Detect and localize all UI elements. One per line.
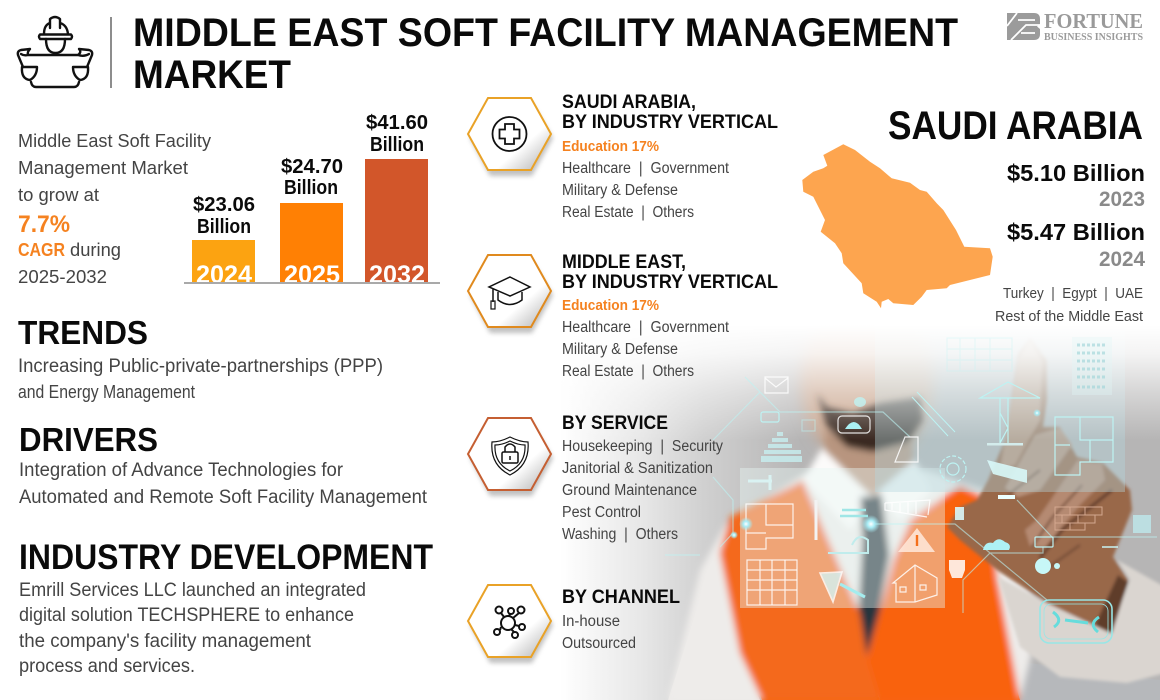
- sleeve: [998, 560, 1160, 683]
- header divider: [110, 17, 112, 88]
- section: by service: Washing | Others: [562, 526, 678, 543]
- bar 2032: Billion: [370, 134, 424, 156]
- title: MIDDLE EAST SOFT FACILITY MANAGEMENT: [133, 11, 958, 55]
- helmet lower: [828, 537, 868, 553]
- section: Saudi Arabia by industry vertical: Military & Defense: [562, 182, 678, 199]
- industry development: process and services.: [19, 656, 195, 677]
- industry development: digital solution TECHSPHERE to enhance: [19, 605, 354, 626]
- title: MARKET: [133, 53, 291, 97]
- market growth text: [18, 130, 212, 287]
- photo: worker touching holographic interface: [560, 285, 1160, 700]
- logo wordmark: FORTUNE: [1044, 9, 1143, 33]
- industry development: INDUSTRY DEVELOPMENT: [19, 538, 433, 577]
- drivers: DRIVERS: [19, 421, 158, 458]
- plug: [998, 495, 1015, 499]
- stacked bars: [761, 432, 802, 462]
- section: by service: Housekeeping | Security: [562, 438, 723, 455]
- section: by service: Janitorial & Sanitization: [562, 460, 713, 477]
- yield triangle: [820, 572, 842, 602]
- market growth text: 2025-2032: [18, 266, 107, 287]
- section: by channel: In-house: [562, 613, 620, 630]
- chair: [895, 437, 918, 462]
- chart axis: [184, 282, 440, 284]
- Saudi Arabia values: $5.10 Billion: [1007, 160, 1145, 186]
- left vest panel: [720, 480, 885, 700]
- holographic icons: [665, 337, 1157, 643]
- trends: TRENDS: [18, 314, 148, 351]
- bar 2025: Billion: [284, 177, 338, 199]
- Saudi Arabia values: $5.47 Billion: [1007, 219, 1145, 245]
- bar 2024: [192, 194, 255, 289]
- right floor plan: [1055, 417, 1113, 475]
- worker base clothing: [668, 600, 1020, 700]
- gears white: [1035, 558, 1060, 574]
- small bars box: [802, 420, 815, 431]
- section: by service: [562, 412, 723, 543]
- bar 2032: $41.60: [366, 112, 428, 134]
- section: Middle East by industry vertical: Healthcare | Government: [562, 319, 730, 336]
- brick wall: [1055, 507, 1102, 530]
- title: [133, 11, 958, 97]
- gear: [940, 456, 966, 482]
- cloud: [983, 539, 1010, 550]
- bar 2025: 2025: [284, 261, 340, 289]
- house: [893, 565, 937, 602]
- wrench: [840, 584, 865, 597]
- middle finger: [1005, 428, 1072, 497]
- crisp base for the bottom edge of the figure: [668, 620, 1160, 700]
- left panel: [740, 468, 945, 608]
- logo: Fortune Business Insights: [1007, 9, 1143, 43]
- warning triangle: [898, 528, 935, 552]
- bar 2032: [365, 112, 428, 289]
- bar 2025: $24.70: [281, 156, 343, 178]
- section: Saudi Arabia by industry vertical: Real Estate | Others: [562, 204, 694, 221]
- tube tool: [917, 392, 955, 432]
- envelope: [765, 377, 788, 393]
- crane: [980, 382, 1040, 444]
- icon: channel network hexagon: [468, 585, 553, 663]
- hands: [22, 67, 88, 80]
- bar 2025: [280, 156, 343, 289]
- collar: [803, 448, 932, 530]
- translucent panels: [740, 325, 1125, 608]
- logo mark: [1007, 13, 1040, 40]
- worker figure: [668, 393, 1040, 700]
- trends: [18, 314, 383, 402]
- CAGR label: CAGR: [18, 240, 65, 260]
- helmet: [39, 17, 72, 39]
- section: by service: BY SERVICE: [562, 412, 668, 434]
- industry development: Emrill Services LLC launched an integrated: [19, 580, 366, 601]
- index finger highlight: [1000, 342, 1042, 470]
- section: by service: Pest Control: [562, 504, 641, 521]
- tie: [858, 494, 890, 660]
- left building grid: [747, 560, 797, 605]
- leaf blob: [854, 397, 866, 407]
- section: Saudi Arabia by industry vertical: [562, 91, 778, 221]
- neck: [825, 430, 915, 495]
- saw: [987, 460, 1027, 483]
- right vest panel: [867, 485, 1020, 700]
- Saudi Arabia values: 2024: [1099, 247, 1145, 271]
- section: Middle East by industry vertical: [562, 251, 778, 380]
- section: Middle East by industry vertical: Military & Defense: [562, 341, 678, 358]
- drivers: Automated and Remote Soft Facility Management: [19, 487, 428, 508]
- section: Saudi Arabia by industry vertical: BY INDUSTRY VERTICAL: [562, 111, 778, 133]
- industry development: [19, 538, 433, 677]
- blueprint: [18, 49, 92, 87]
- trends: Increasing Public-private-partnerships (PPP): [18, 356, 383, 377]
- wrench box: [1040, 600, 1112, 643]
- industry development: the company's facility management: [19, 631, 312, 652]
- ladder: [885, 500, 930, 517]
- post sign: [814, 500, 818, 540]
- head: [801, 295, 933, 465]
- hand and sleeve: [947, 337, 1160, 683]
- section: by channel: [562, 586, 680, 652]
- market growth text: Middle East Soft Facility: [18, 130, 212, 151]
- lock box: [761, 412, 779, 422]
- top fade to white: [560, 285, 1160, 440]
- icon: healthcare hexagon: [468, 98, 553, 176]
- bar 2024: Billion: [197, 216, 251, 238]
- Saudi Arabia values: [1007, 160, 1145, 271]
- photo backdrop: [560, 325, 1160, 700]
- drivers: Integration of Advance Technologies for: [19, 460, 344, 481]
- icon: graduation cap hexagon: [468, 255, 553, 333]
- beard: [817, 393, 923, 452]
- upper right panel: [875, 325, 1125, 492]
- section: Middle East by industry vertical: Real Estate | Others: [562, 363, 694, 380]
- bar chart: [184, 112, 440, 289]
- section: Middle East by industry vertical: BY INDUSTRY VERTICAL: [562, 271, 778, 293]
- icon: security shield hexagon: [468, 418, 553, 496]
- top grid building: [947, 338, 1012, 371]
- section: by channel: BY CHANNEL: [562, 586, 680, 608]
- section: by channel: Outsourced: [562, 635, 636, 652]
- trends: and Energy Management: [18, 381, 195, 402]
- market growth text: during: [70, 239, 121, 260]
- service bell: [838, 416, 870, 433]
- section: by service: Ground Maintenance: [562, 482, 697, 499]
- face: [46, 39, 65, 53]
- bar 2024: $23.06: [193, 194, 255, 216]
- ring finger: [1025, 460, 1105, 547]
- hand: [947, 337, 1132, 633]
- logo tagline: BUSINESS INSIGHTS: [1044, 32, 1143, 43]
- hammer: [748, 475, 772, 490]
- bar 2032: 2032: [369, 261, 425, 289]
- small square: [1133, 515, 1151, 533]
- CAGR value: 7.7%: [18, 211, 70, 238]
- drivers: [19, 421, 428, 508]
- section: Saudi Arabia by industry vertical: SAUDI ARABIA,: [562, 91, 696, 113]
- section: Middle East by industry vertical: Education 17%: [562, 297, 659, 314]
- key: [1102, 546, 1118, 548]
- other regions: Turkey | Egypt | UAE: [1003, 285, 1143, 302]
- market growth text: to grow at: [18, 184, 99, 205]
- other regions: Rest of the Middle East: [995, 308, 1144, 325]
- glow dots: [730, 409, 1041, 539]
- people: [949, 560, 965, 578]
- header icon: engineer with blueprint: [18, 17, 92, 87]
- other regions: [995, 285, 1144, 325]
- tall building: [1072, 337, 1112, 395]
- little finger shadow: [1040, 490, 1112, 558]
- bar 2024: 2024: [196, 261, 252, 289]
- helmet: [840, 510, 868, 516]
- left floor plan: [746, 504, 793, 549]
- Saudi Arabia values: 2023: [1099, 187, 1145, 211]
- circuit lines: [665, 377, 1157, 613]
- section: Saudi Arabia by industry vertical: Healthcare | Government: [562, 160, 730, 177]
- small plug box: [1035, 537, 1053, 547]
- map: Saudi Arabia: [802, 144, 993, 308]
- section: Saudi Arabia by industry vertical: Education 17%: [562, 138, 659, 155]
- cup: [955, 507, 964, 520]
- section: Middle East by industry vertical: MIDDLE EAST,: [562, 251, 686, 273]
- wrist shadow: [1095, 575, 1128, 633]
- shirt: [668, 470, 1040, 700]
- market growth text: Management Market: [18, 157, 188, 178]
